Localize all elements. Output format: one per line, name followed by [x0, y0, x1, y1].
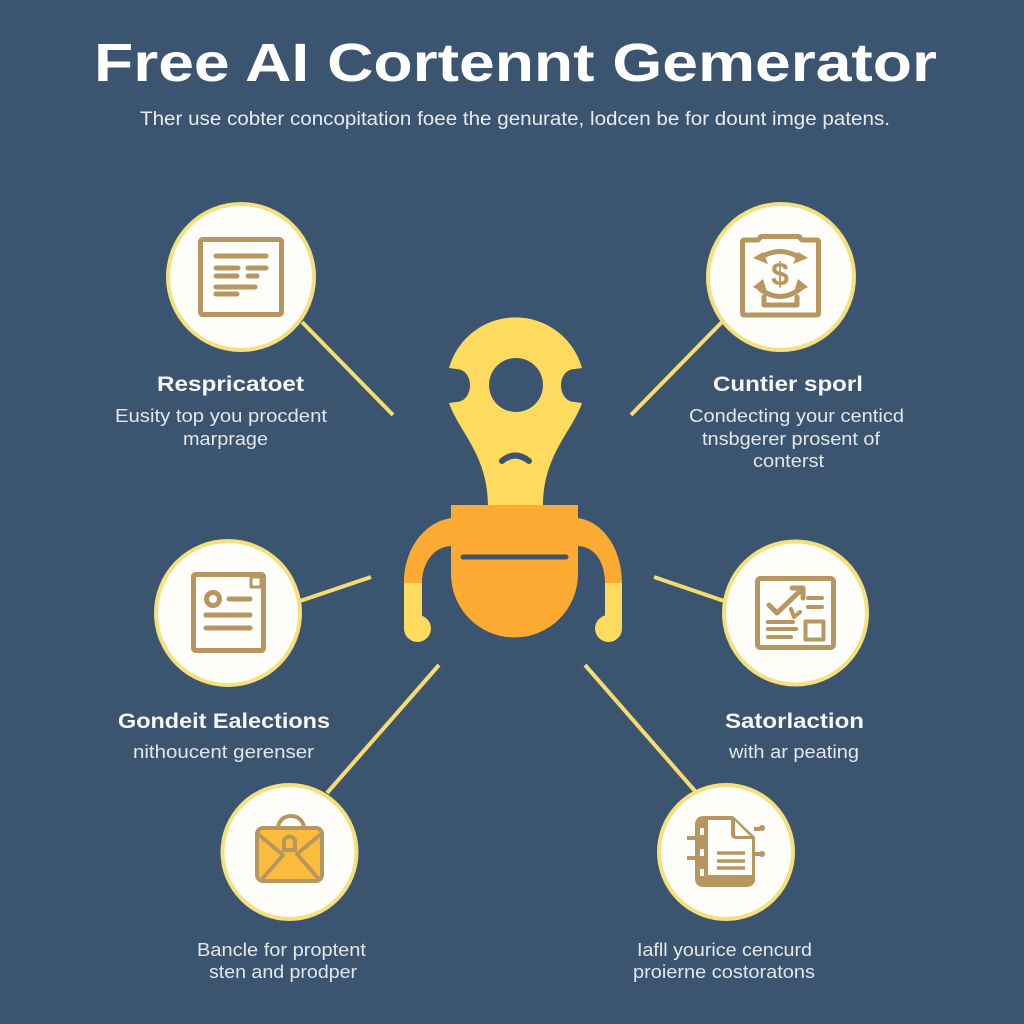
circle badge [156, 541, 300, 685]
icon: profile document [194, 574, 264, 650]
panel: top left [115, 204, 327, 449]
robot chest slot [463, 554, 566, 560]
description [689, 406, 904, 471]
description [633, 940, 815, 982]
circle badge [659, 785, 793, 919]
icon: notebook page [687, 816, 765, 887]
description: tnsbgerer prosent of [702, 429, 881, 449]
panel: middle left [118, 541, 330, 762]
panel: middle right [724, 542, 867, 762]
heading: Cuntier sporl [713, 373, 863, 396]
heading: Gondeit Ealections [118, 710, 330, 733]
icon: text document [200, 240, 282, 314]
circle badge [724, 542, 867, 684]
icon: locked envelope briefcase [257, 816, 322, 881]
description: proierne costoratons [633, 962, 815, 982]
circle badge [708, 204, 854, 350]
robot head [449, 317, 582, 506]
description: conterst [753, 451, 824, 471]
description: Bancle for proptent [197, 940, 366, 960]
title: Free AI Cortennt Gemerator [94, 33, 937, 93]
description [115, 406, 327, 449]
description: Iafll yourice cencurd [637, 940, 812, 960]
central robot mascot [404, 317, 622, 642]
description: Condecting your centicd [689, 406, 904, 426]
description [197, 940, 366, 982]
icon: money clipboard: $ [771, 256, 789, 292]
panel: top right [689, 204, 904, 471]
connector lines [300, 322, 724, 793]
icon: money clipboard [742, 236, 818, 315]
icon: checklist chart [758, 578, 834, 648]
description: sten and prodper [209, 962, 357, 982]
subtitle: Ther use cobter concopitation foee the genurate, lodcen be for dount imge patens. [140, 109, 890, 130]
robot arms [404, 518, 622, 642]
circle badge [222, 785, 356, 919]
description: nithoucent gerenser [133, 742, 314, 762]
robot body [451, 505, 578, 637]
description: Eusity top you procdent [115, 406, 327, 426]
circle badge [168, 204, 314, 350]
heading: Respricatoet [157, 373, 304, 396]
heading: Satorlaction [725, 710, 864, 733]
panel: bottom right [633, 785, 815, 982]
panel: bottom left [197, 785, 366, 982]
description: with ar peating [728, 742, 859, 762]
robot eye [489, 358, 543, 412]
robot mouth [502, 456, 529, 461]
description: marprage [183, 429, 268, 449]
